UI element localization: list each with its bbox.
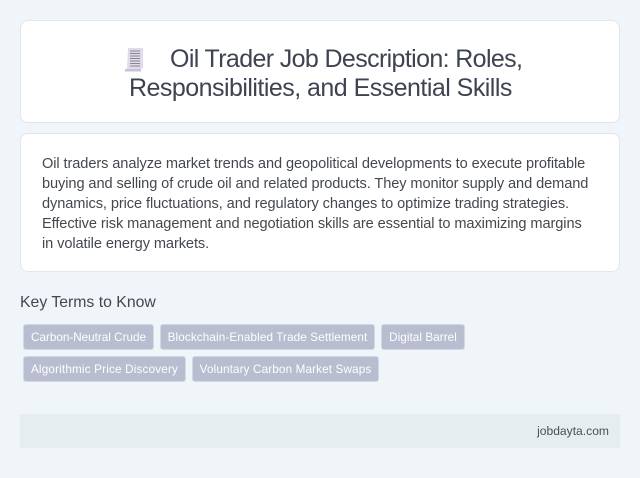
tag: Algorithmic Price Discovery: [31, 363, 178, 376]
tag: [23, 324, 154, 350]
text block: description: dynamics, price fluctuations, and regulatory changes to optimize trading strategies.: [42, 196, 569, 212]
tag list: [23, 324, 465, 382]
tag: Digital Barrel: [389, 331, 457, 344]
panel: description card: [20, 133, 620, 272]
tag: Voluntary Carbon Market Swaps: [200, 363, 371, 376]
title: Oil Trader Job Description: Roles,: [170, 45, 522, 73]
footer bar: [20, 414, 620, 448]
panel: title card: Responsibilities, and Essential Skills: [129, 74, 512, 102]
text block: description: in volatile energy markets.: [42, 236, 209, 252]
tag: [192, 356, 379, 382]
icon: document receipt: [125, 48, 143, 72]
text block: description: buying and selling of crude oil and related products. They monitor supply and demand: [42, 176, 588, 192]
panel: title card: [20, 20, 620, 123]
footer source text: jobdayta.com: [537, 424, 609, 438]
heading: key terms: Key Terms to Know: [20, 294, 156, 311]
tag: Carbon-Neutral Crude: [31, 331, 146, 344]
tag: [23, 356, 186, 382]
tag: [160, 324, 375, 350]
text block: description: Oil traders analyze market trends and geopolitical developments to execute profitable: [42, 156, 585, 172]
tag: [381, 324, 465, 350]
text block: description: [42, 156, 588, 252]
text block: description: Effective risk management and negotiation skills are essential to maximizing margins: [42, 216, 582, 232]
tag: Blockchain-Enabled Trade Settlement: [168, 331, 367, 344]
